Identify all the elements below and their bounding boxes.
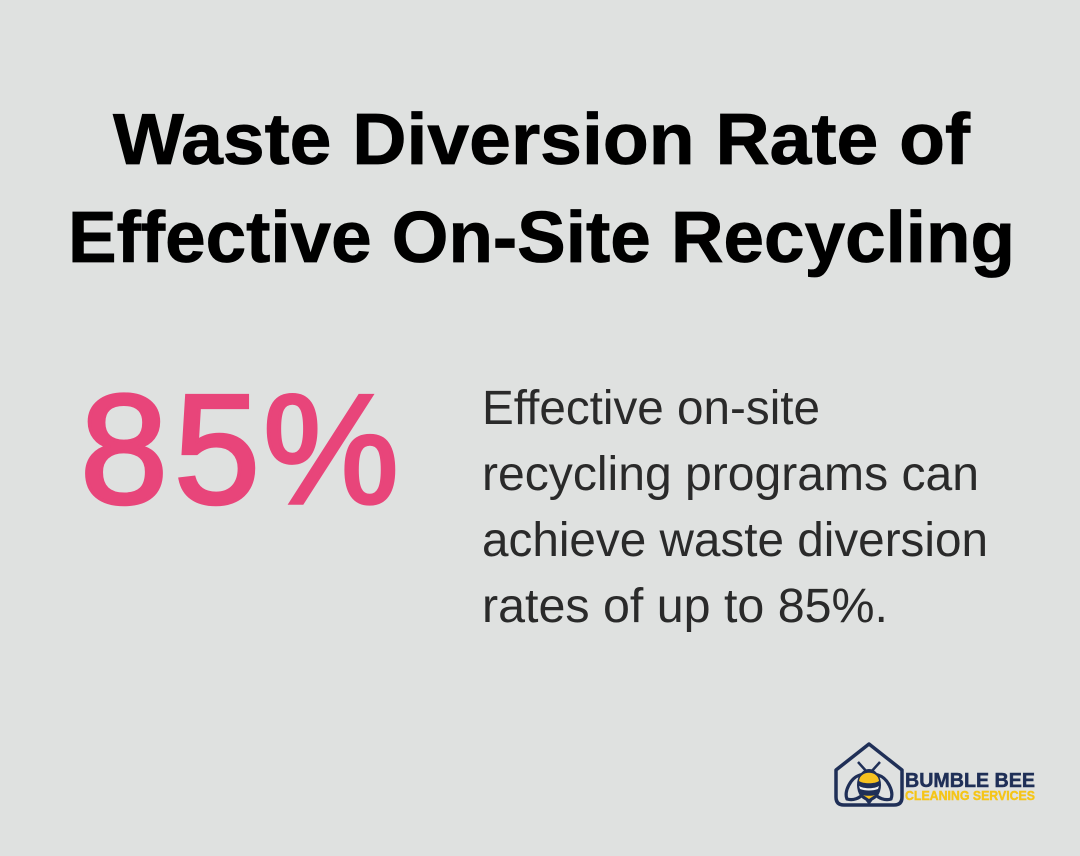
title	[68, 100, 1015, 278]
big stat: 85%: 5	[174, 363, 260, 537]
description text: recycling programs can	[482, 448, 979, 501]
big stat: 85%: %	[263, 363, 399, 537]
description text: achieve waste diversion	[482, 514, 988, 567]
big stat: 85%: 8	[80, 363, 168, 537]
icon: house outline with bee	[836, 744, 902, 805]
description text: Effective on-site	[482, 382, 820, 435]
description text: rates of up to 85%.	[482, 580, 888, 633]
logo wordmark: BUMBLE BEE	[905, 769, 1035, 792]
logo tagline: CLEANING SERVICES	[905, 789, 1035, 803]
logo: Bumble Bee Cleaning Services	[836, 744, 1035, 805]
title: Waste Diversion Rate of	[113, 100, 971, 180]
title: Effective On-Site Recycling	[68, 198, 1015, 278]
description text	[482, 382, 988, 633]
